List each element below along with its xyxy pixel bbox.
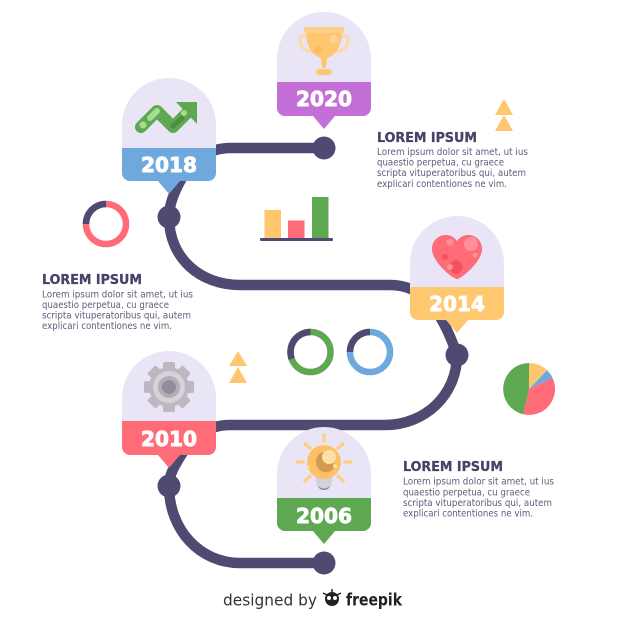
text block: middle left: quaestio perpetua, cu graece	[42, 300, 169, 311]
icon: trophy	[300, 27, 348, 75]
text block: bottom right: explicari contentiones ne vim.	[403, 508, 533, 520]
text block: top right	[377, 131, 528, 190]
text block: top right: explicari contentiones ne vim.	[377, 179, 507, 190]
footer credit	[223, 589, 403, 610]
text block: bottom right: scripta vituperatoribus qui, autem	[403, 498, 552, 509]
text block: top right: LOREM IPSUM	[377, 131, 477, 146]
footer credit: designed by	[223, 590, 317, 610]
year: 2010: 2010	[141, 427, 197, 451]
text block: middle left: Lorem ipsum dolor sit amet, ut ius	[42, 289, 193, 300]
text block: middle left: LOREM IPSUM	[42, 273, 142, 288]
icon: light bulb	[297, 435, 351, 490]
bar chart	[260, 197, 333, 241]
text block: bottom right: LOREM IPSUM	[403, 460, 503, 475]
donut: green	[290, 332, 330, 372]
text block: top right: Lorem ipsum dolor sit amet, ut ius	[377, 147, 528, 158]
icon: heart	[432, 235, 482, 279]
icon: gear	[144, 362, 194, 412]
pie chart	[503, 363, 555, 415]
pin: 2010	[122, 351, 216, 468]
text block: bottom right: quaestio perpetua, cu graece	[403, 487, 530, 498]
pin: 2014	[410, 216, 504, 333]
text block: bottom right: Lorem ipsum dolor sit amet, ut ius	[403, 477, 554, 488]
text block: bottom right	[403, 460, 554, 520]
year: 2020: 2020	[296, 87, 352, 111]
pin: 2020	[277, 12, 371, 129]
text block: top right: quaestio perpetua, cu graece	[377, 158, 504, 169]
text block: middle left: scripta vituperatoribus qui, autem	[42, 310, 191, 322]
icon: freepik logo	[323, 589, 341, 606]
text block: top right: scripta vituperatoribus qui, autem	[377, 168, 526, 179]
year: 2014: 2014	[429, 292, 485, 316]
text block: middle left	[42, 273, 193, 332]
donut: blue	[350, 332, 390, 372]
icon: triangles top right	[495, 99, 513, 131]
icon: growth arrow	[140, 102, 197, 128]
text block: middle left: explicari contentiones ne vim.	[42, 321, 172, 332]
year: 2006: 2006	[296, 504, 352, 528]
year: 2018: 2018	[141, 153, 197, 177]
timeline path	[158, 136, 468, 574]
footer credit: freepik	[346, 590, 403, 610]
pin: 2018	[122, 78, 216, 194]
donut: red	[86, 204, 126, 244]
icon: triangles left	[229, 351, 247, 383]
pin: 2006	[277, 427, 371, 544]
